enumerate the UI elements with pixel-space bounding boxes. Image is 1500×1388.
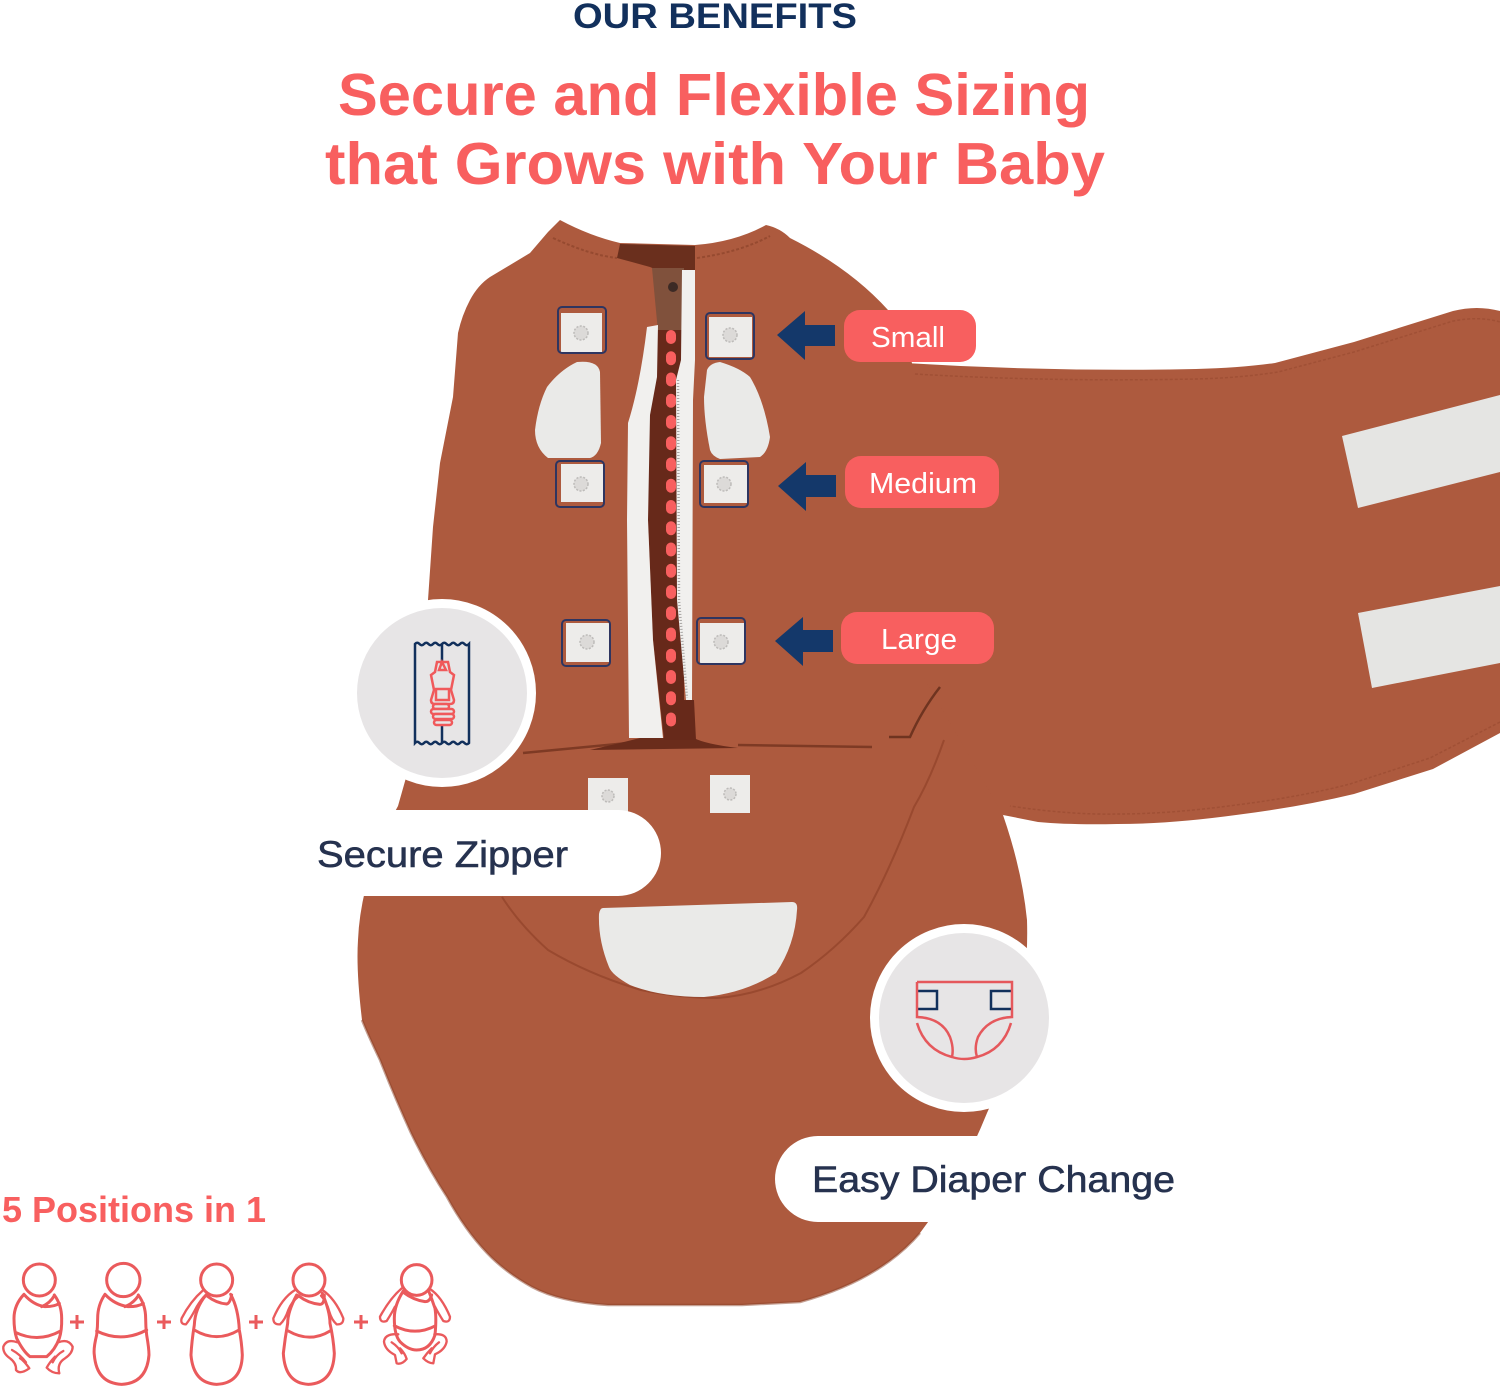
swaddle wing (880, 308, 1500, 824)
waist fold (523, 743, 872, 753)
velcro patches (535, 362, 797, 997)
pill easy diaper change (775, 1136, 1250, 1222)
pill secure zipper (250, 810, 661, 896)
arrow medium (778, 462, 836, 511)
pill medium (845, 456, 999, 508)
title: Secure and Flexible Sizing (338, 62, 1090, 128)
size snaps (561, 313, 752, 814)
pill large: Large (881, 624, 957, 656)
diaper icon circle (874, 928, 1054, 1108)
snap outlines (556, 307, 754, 666)
neck label (652, 268, 684, 332)
positions heading: 5 Positions in 1 (2, 1189, 266, 1230)
icon: zipper (415, 643, 469, 744)
neck opening (617, 244, 695, 270)
swaddle body (358, 220, 1027, 1305)
arrow small (777, 311, 835, 360)
bottom edge shadow (362, 1020, 920, 1305)
zipper dots (666, 335, 676, 722)
icon: position 5 (380, 1265, 450, 1364)
title: that Grows with Your Baby (325, 131, 1105, 197)
snap centers (574, 326, 737, 802)
zipper right tape (676, 270, 695, 700)
icon: position 1 (3, 1264, 73, 1373)
velcro strip bottom (1358, 586, 1500, 688)
velcro strip top (1342, 395, 1500, 508)
icon: position 4 (273, 1264, 343, 1384)
icon: position 2 (94, 1263, 149, 1384)
pill easy diaper change: Easy Diaper Change (812, 1159, 1175, 1200)
side pleat (889, 687, 940, 737)
icon: position 3 (181, 1264, 242, 1384)
pill small: Small (871, 322, 945, 354)
plus signs (70, 1315, 368, 1329)
positions icons (3, 1263, 242, 1384)
arrow large (775, 617, 833, 666)
pill medium: Medium (869, 468, 977, 500)
pill small (844, 310, 976, 362)
collar stitching (553, 236, 770, 258)
icon: diaper (917, 982, 1012, 1059)
pill secure zipper: Secure Zipper (317, 834, 568, 875)
zipper left tape (627, 325, 663, 738)
zipper icon circle (352, 604, 532, 782)
title (325, 62, 1105, 197)
center placket (648, 330, 696, 740)
flap seam (502, 740, 944, 998)
pill large (841, 612, 994, 664)
